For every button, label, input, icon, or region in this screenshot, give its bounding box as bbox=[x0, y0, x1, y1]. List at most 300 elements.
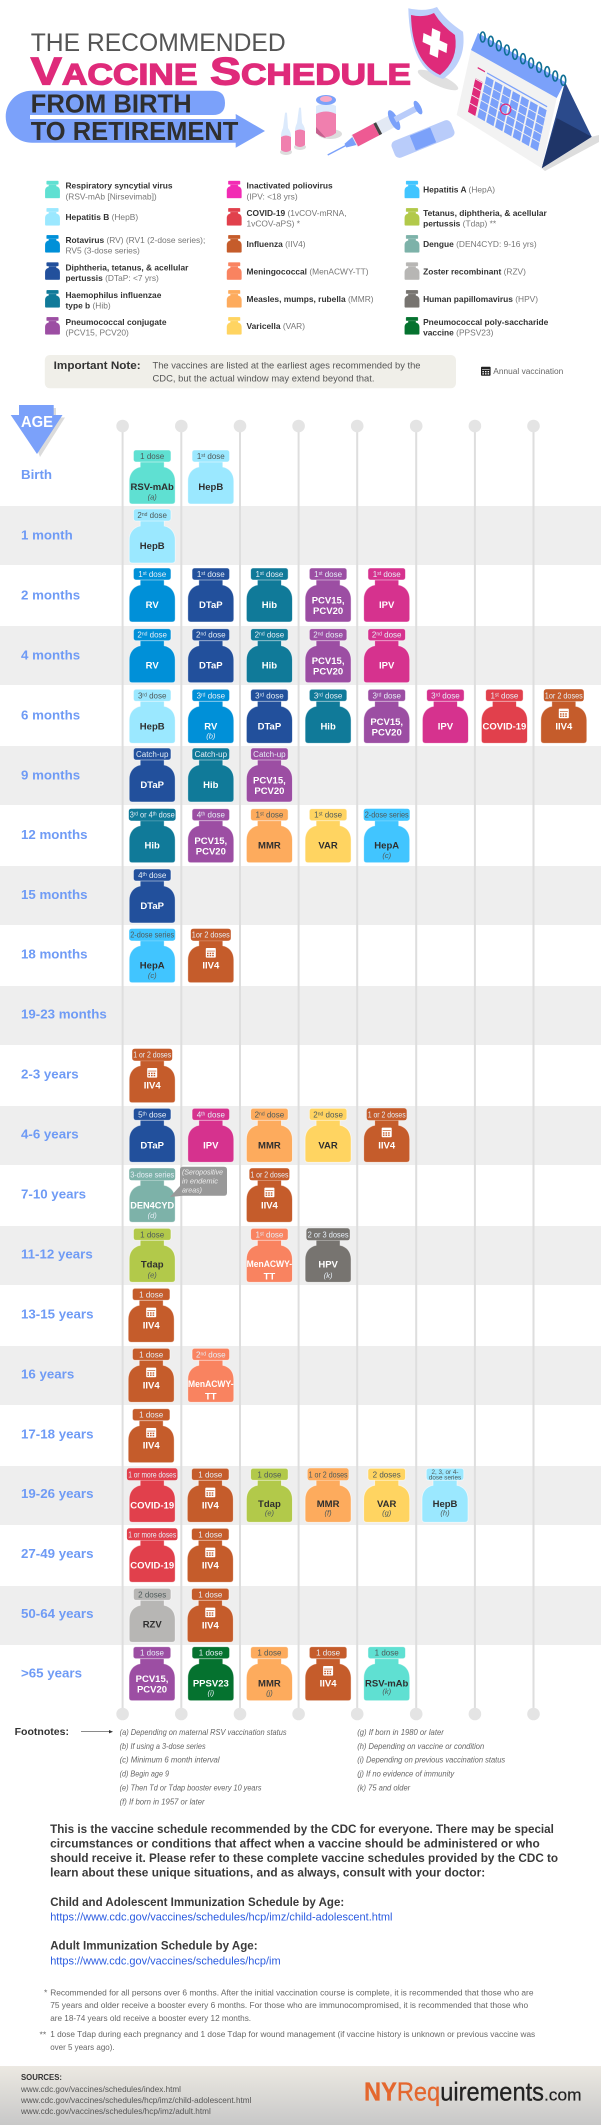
vial: HepA: 2-dose series bbox=[130, 931, 174, 940]
vial: IIV4 bbox=[364, 1108, 410, 1162]
vial: Hib: or 4 bbox=[138, 811, 153, 820]
vial: COVID-19: COVID-19 bbox=[130, 1500, 174, 1511]
logo: NYRequirements.com: NYRequirements bbox=[364, 2077, 544, 2107]
vial: DTaP: DTaP bbox=[140, 1140, 165, 1151]
age label: 18 months bbox=[21, 947, 88, 962]
callout: seropositive in endemic areas: (Seropositive bbox=[182, 1168, 223, 1177]
vial: IIV4 bbox=[305, 1647, 351, 1701]
vial: RV bbox=[188, 689, 234, 743]
vial: IPV: IPV bbox=[203, 1140, 219, 1151]
age label: 6 months bbox=[21, 707, 80, 722]
vial: MMR: dose bbox=[264, 811, 284, 820]
vial: VAR: 2 doses bbox=[373, 1470, 401, 1479]
vial: IIV4: IIV4 bbox=[202, 961, 220, 972]
age label: 27-49 years bbox=[21, 1546, 93, 1561]
vial: HPV bbox=[305, 1228, 351, 1282]
important note panel: CDC, but the actual window may extend beyond that. bbox=[152, 374, 374, 384]
vial: RSV-mAb bbox=[129, 450, 175, 504]
sources: www.cdc.gov/vaccines/schedules/hcp/imz/adult.html bbox=[20, 2106, 211, 2116]
vial: PCV: PCV20 bbox=[372, 727, 402, 738]
vial: Tdap: (e) bbox=[265, 1508, 274, 1517]
vial: RSV-mAb bbox=[364, 1647, 410, 1701]
legend item: zoster bbox=[405, 262, 526, 280]
legend item: HPV: Human papillomavirus (HPV) bbox=[423, 294, 538, 304]
text block: asterisk notes: Recommended for all persons over 6 months. After the initial vaccination course is complete, it is recommended that those who are bbox=[50, 1987, 534, 1997]
legend item: PPSV23 bbox=[405, 317, 549, 338]
legend item: PPSV23: Pneumococcal poly-saccharide bbox=[423, 317, 549, 327]
legend item: HepB: Hepatitis B (HepB) bbox=[66, 212, 138, 222]
vial: DTaP: dose bbox=[147, 871, 167, 880]
vial: HepB bbox=[129, 509, 175, 563]
vial: IPV: nd bbox=[376, 632, 382, 638]
important note panel bbox=[45, 355, 456, 388]
vial: IPV: dose bbox=[440, 691, 460, 700]
vial: IPV: IPV bbox=[438, 721, 454, 732]
vial: IIV4: IIV4 bbox=[261, 1200, 279, 1211]
text block: CDC explanation bbox=[50, 1823, 558, 1879]
vial: PPSV23: 1 dose bbox=[199, 1649, 223, 1658]
vial: MMR bbox=[305, 1468, 351, 1522]
row: 27-49 years bbox=[21, 1528, 233, 1582]
vial: HepB: 1 bbox=[197, 452, 201, 461]
vial: IIV4: IIV4 bbox=[555, 721, 573, 732]
vial: IPV: dose bbox=[381, 570, 401, 579]
vial: PPSV23: (i) bbox=[207, 1689, 215, 1698]
legend item: HepB bbox=[45, 208, 138, 226]
vial: HepB: nd bbox=[142, 512, 148, 518]
vial: IIV4 bbox=[187, 1588, 233, 1642]
legend item: Tdap: Tetanus, diphtheria, & acellular bbox=[423, 208, 547, 218]
vial: PCV: 1 dose bbox=[140, 1649, 165, 1658]
vial: MenACWY-TT: MenACWY- bbox=[188, 1379, 234, 1390]
vial: DEN4CYD: DEN4CYD bbox=[130, 1200, 175, 1210]
vial: DTaP: 2 bbox=[196, 631, 200, 640]
vial: PCV bbox=[129, 1647, 175, 1701]
vial: Hib bbox=[188, 748, 234, 802]
vial: MenACWY-TT: 1 bbox=[255, 1230, 260, 1239]
footnotes: (j) If no evidence of immunity bbox=[357, 1768, 455, 1778]
vial: MMR: dose bbox=[265, 1110, 285, 1119]
vial: Tdap: Tdap bbox=[141, 1259, 164, 1270]
vial: IIV4: 1 dose bbox=[198, 1590, 223, 1599]
vial: PCV: PCV20 bbox=[313, 606, 343, 617]
row: 7-10 years bbox=[21, 1167, 292, 1222]
arrow banner: from birth to retirement: FROM BIRTH bbox=[31, 91, 192, 119]
title line: the recommended: THE RECOMMENDED bbox=[31, 29, 286, 57]
vial: IIV4: 1 dose bbox=[198, 1530, 223, 1539]
legend item: RSV: (RSV-mAb [Nirsevimab]) bbox=[66, 191, 157, 201]
vial: IIV4: 1or 2 doses bbox=[545, 691, 583, 700]
vial: RV bbox=[129, 629, 175, 683]
arrow banner: from birth to retirement: TO RETIREMENT bbox=[31, 118, 239, 146]
vial: IPV: dose bbox=[382, 631, 402, 640]
age label: 1 month bbox=[21, 528, 73, 543]
vial: MenACWY-TT: st bbox=[260, 1231, 264, 1237]
text block: child schedule link bbox=[50, 1896, 392, 1923]
vial: Hib: 1 bbox=[255, 570, 260, 579]
text block: adult schedule link bbox=[50, 1939, 281, 1967]
vial: HepB: HepB bbox=[140, 721, 165, 732]
legend item: influenza bbox=[227, 235, 306, 253]
vial: PPSV23 bbox=[188, 1647, 234, 1701]
legend item: MMR bbox=[227, 290, 374, 308]
vial: IIV4: IIV4 bbox=[320, 1679, 337, 1690]
legend item: DTaP: Diphtheria, tetanus, & acellular bbox=[66, 262, 189, 272]
row: 15 months bbox=[21, 869, 175, 923]
vial: HepB: dose bbox=[147, 691, 167, 700]
row: 2-3 years bbox=[21, 1049, 175, 1103]
vial: MMR: nd bbox=[259, 1111, 265, 1117]
vial: RSV-mAb: RSV-mAb bbox=[131, 482, 174, 493]
vial: IPV: st bbox=[377, 571, 382, 577]
vial: RSV-mAb: 1 dose bbox=[140, 452, 165, 461]
vial: PCV: 1 bbox=[314, 570, 319, 579]
vial: DTaP bbox=[129, 1108, 175, 1162]
vial: RSV-mAb: RSV-mAb bbox=[365, 1679, 409, 1690]
vial: Hib: Hib bbox=[320, 721, 336, 732]
vial: DTaP bbox=[188, 629, 234, 683]
vial: HepA: HepA bbox=[140, 961, 165, 972]
vial: PCV: PCV15, bbox=[253, 776, 286, 786]
illustration: syringe bbox=[323, 96, 426, 165]
vial: COVID-19 bbox=[481, 689, 527, 743]
age label: >65 years bbox=[21, 1666, 82, 1681]
vial: MenACWY-TT: nd bbox=[200, 1351, 206, 1357]
text block: child schedule link: https://www.cdc.gov/vaccines/schedules/hcp/imz/child-adolescent.html bbox=[50, 1911, 392, 1923]
vial: MMR: 2 bbox=[255, 1110, 259, 1119]
vial: RV: RV bbox=[146, 600, 159, 611]
vial: MMR: 1 or 2 doses bbox=[309, 1470, 348, 1479]
vial: RV: RV bbox=[204, 721, 218, 732]
text block: child schedule link: Child and Adolescent Immunization Schedule by Age: bbox=[50, 1896, 344, 1909]
footnotes: (d) Begin age 9 bbox=[120, 1768, 169, 1778]
vial: RZV: 2 doses bbox=[138, 1590, 166, 1599]
row: 1 month bbox=[21, 509, 175, 563]
vial: IPV: 2 bbox=[372, 631, 376, 640]
legend item: RV: Rotavirus (RV) (RV1 (2-dose series); bbox=[66, 235, 205, 245]
vial: IPV: 4 bbox=[197, 1110, 201, 1119]
vial: PCV: PCV15, bbox=[312, 656, 344, 667]
age label: 2-3 years bbox=[21, 1067, 79, 1082]
title line: schedule: SCHEDULE bbox=[210, 50, 411, 93]
vial: PCV: PCV20 bbox=[313, 667, 343, 678]
vial: RV: 1 bbox=[138, 570, 143, 579]
vial: RZV bbox=[129, 1588, 175, 1642]
vial: COVID-19 bbox=[127, 1468, 178, 1522]
vial: HepB: dose bbox=[147, 511, 168, 520]
vial: Tdap: 1 dose bbox=[140, 1230, 165, 1239]
vial: VAR: dose bbox=[323, 1110, 343, 1119]
vial: MenACWY-TT: TT bbox=[264, 1272, 275, 1283]
vial: DTaP bbox=[188, 568, 234, 622]
vial: MMR: 1 bbox=[255, 811, 260, 820]
vial: IIV4: IIV4 bbox=[143, 1441, 160, 1452]
vial: DTaP: dose bbox=[205, 570, 225, 579]
vial: IIV4: IIV4 bbox=[143, 1320, 160, 1331]
vial: VAR: dose bbox=[322, 811, 343, 820]
vial: IIV4: IIV4 bbox=[202, 1560, 219, 1571]
vial: DTaP: DTaP bbox=[199, 661, 223, 672]
vial: PCV: dose bbox=[381, 691, 401, 700]
vial: MMR: MMR bbox=[258, 1679, 281, 1690]
vial: IPV bbox=[364, 629, 410, 683]
vial: DTaP: DTaP bbox=[199, 600, 223, 611]
vial: VAR: st bbox=[319, 812, 323, 818]
vial: RSV-mAb: (k) bbox=[382, 1687, 392, 1696]
vial: COVID-19 bbox=[127, 1528, 178, 1582]
vial: IIV4 bbox=[128, 1348, 174, 1402]
text block: asterisk notes: are 18-74 years old receive a booster every 12 months. bbox=[50, 2013, 251, 2023]
vial: PCV bbox=[364, 689, 410, 743]
age label: 7-10 years bbox=[21, 1187, 86, 1202]
vial: Hib: Hib bbox=[262, 661, 277, 672]
vial: HepB: 2, 3, or 4- bbox=[432, 1469, 458, 1476]
vial: RSV-mAb: (a) bbox=[148, 492, 157, 502]
vial: MMR: MMR bbox=[258, 1140, 281, 1151]
age header arrow bbox=[11, 405, 65, 457]
vial: DTaP: DTaP bbox=[258, 721, 282, 732]
vial: HepA bbox=[364, 809, 410, 863]
text block: CDC explanation: should receive it. Please refer to these complete vaccine schedules provided by the CDC to bbox=[50, 1852, 558, 1865]
legend item: DTaP bbox=[45, 262, 189, 283]
vial: IPV bbox=[364, 568, 410, 622]
vial: DTaP bbox=[246, 689, 292, 743]
footnotes: (i) Depending on previous vaccination status bbox=[357, 1754, 506, 1764]
age label: 19-23 months bbox=[21, 1007, 107, 1022]
vial: DTaP: rd bbox=[260, 692, 264, 698]
legend item: PPSV23: vaccine (PPSV23) bbox=[423, 328, 494, 338]
vial: PCV bbox=[305, 568, 351, 622]
illustration: ampoules bbox=[280, 108, 306, 155]
vial: MenACWY-TT bbox=[188, 1348, 234, 1403]
vial: MenACWY-TT bbox=[246, 1228, 292, 1283]
vial: HepB bbox=[422, 1468, 468, 1522]
age label: 4 months bbox=[21, 648, 80, 663]
vial: MMR bbox=[246, 1647, 292, 1701]
vial: Hib: th bbox=[153, 812, 157, 818]
vial: DTaP: 1 bbox=[197, 570, 201, 579]
vial: IIV4: IIV4 bbox=[143, 1380, 160, 1391]
vial: VAR: VAR bbox=[318, 1140, 338, 1151]
vial: MMR: (f) bbox=[325, 1508, 332, 1517]
illustration: bandage bbox=[390, 119, 456, 159]
vial: Hib: dose bbox=[265, 631, 285, 640]
vial: Hib bbox=[246, 629, 292, 683]
legend item: MMR: Measles, mumps, rubella (MMR) bbox=[246, 294, 374, 304]
footnotes: (b) If using a 3-dose series bbox=[120, 1741, 206, 1751]
vial: IIV4: 1 dose bbox=[316, 1649, 341, 1658]
vial: DTaP: dose bbox=[264, 691, 284, 700]
age label: 17-18 years bbox=[21, 1426, 93, 1441]
vial: PCV: dose bbox=[205, 811, 225, 820]
title bbox=[31, 29, 411, 93]
sources: SOURCES: bbox=[21, 2072, 62, 2082]
vial: RV bbox=[129, 568, 175, 622]
vial: RZV: RZV bbox=[143, 1619, 162, 1630]
vial: PCV: dose bbox=[322, 570, 343, 579]
row: 4-6 years bbox=[21, 1108, 410, 1162]
logo: NYRequirements.com: .com bbox=[544, 2086, 582, 2105]
vial: HPV: 2 or 3 doses bbox=[308, 1230, 349, 1239]
vial: COVID-19: 1 bbox=[490, 691, 495, 700]
legend item: HPV bbox=[405, 290, 538, 308]
vial: IIV4 bbox=[128, 1288, 174, 1342]
vial: PCV: PCV20 bbox=[137, 1685, 167, 1696]
vial: MMR: MMR bbox=[317, 1499, 340, 1510]
vial: HepA: 2-dose series bbox=[365, 811, 409, 820]
important note panel: Important Note: bbox=[54, 360, 141, 372]
vial: Tdap: 1 dose bbox=[257, 1470, 282, 1479]
vial: HepA: HepA bbox=[374, 841, 399, 852]
vial: MenACWY-TT: 2 bbox=[196, 1350, 200, 1359]
vial: MenACWY-TT: dose bbox=[206, 1350, 226, 1359]
illustration: calendar bbox=[457, 32, 599, 171]
legend item: dengue: Dengue (DEN4CYD: 9-16 yrs) bbox=[423, 239, 537, 249]
legend item: meningococcal bbox=[227, 262, 369, 280]
legend item: RV bbox=[45, 235, 205, 256]
age label: 50-64 years bbox=[21, 1606, 93, 1621]
vial: IIV4 bbox=[541, 689, 587, 743]
vial: PCV: PCV15, bbox=[370, 717, 403, 728]
vial: HepB: dose bbox=[205, 452, 225, 461]
vial: IPV: th bbox=[201, 1111, 206, 1117]
legend item: Tdap: pertussis (Tdap) ** bbox=[423, 219, 497, 229]
vial: DTaP: DTaP bbox=[140, 780, 165, 791]
vial: COVID-19: COVID-19 bbox=[482, 721, 526, 732]
vial: COVID-19: COVID-19 bbox=[130, 1560, 174, 1571]
legend item: varicella bbox=[227, 317, 305, 335]
vial: PCV: 4 bbox=[197, 811, 201, 820]
vial: DTaP bbox=[129, 869, 175, 923]
text block: asterisk notes: ** bbox=[40, 2030, 47, 2040]
sources: www.cdc.gov/vaccines/schedules/hcp/imz/child-adolescent.html bbox=[20, 2095, 251, 2105]
vial: MMR bbox=[246, 1108, 292, 1162]
row: 50-64 years bbox=[21, 1588, 233, 1642]
vial: PCV: th bbox=[201, 812, 206, 818]
vial: IIV4: 1 dose bbox=[198, 1470, 223, 1479]
legend: vaccine key bbox=[45, 181, 549, 338]
vial: DTaP: th bbox=[143, 1111, 147, 1117]
footnotes: (c) Minimum 6 month interval bbox=[120, 1754, 221, 1764]
vial: PCV: rd bbox=[377, 692, 382, 698]
vial: Hib: dose bbox=[323, 691, 343, 700]
vial: Hib: 3 bbox=[314, 691, 318, 700]
vial: Tdap: (e) bbox=[148, 1270, 157, 1279]
text block: CDC explanation: This is the vaccine schedule recommended by the CDC for everyone. There may be special bbox=[50, 1823, 554, 1836]
vial: DTaP: DTaP bbox=[140, 901, 165, 912]
vial: VAR: nd bbox=[318, 1111, 324, 1117]
vial: IIV4 bbox=[129, 1049, 175, 1103]
row: 11-12 years bbox=[21, 1228, 351, 1283]
vial: IIV4 bbox=[246, 1168, 292, 1222]
vial: DTaP bbox=[129, 748, 175, 802]
vial: IPV: IPV bbox=[379, 661, 395, 672]
vial: Tdap: Tdap bbox=[258, 1499, 281, 1510]
vial: IIV4: 1 or 2 doses bbox=[250, 1170, 288, 1179]
vial: HepB: HepB bbox=[433, 1499, 458, 1510]
age header arrow: AGE bbox=[21, 414, 53, 431]
vial: DTaP: 5 bbox=[138, 1110, 143, 1119]
illustration: medicine bottle bbox=[316, 95, 342, 139]
vial: IIV4 bbox=[188, 929, 234, 983]
vial: HepA bbox=[129, 929, 175, 983]
vial: IIV4: IIV4 bbox=[202, 1500, 219, 1511]
text block: CDC explanation: circumstances or conditions that affect when a vaccine should be administered or who bbox=[50, 1837, 540, 1850]
vial: IPV: IPV bbox=[379, 600, 395, 611]
vial: COVID-19: st bbox=[495, 692, 499, 698]
vial: MMR: 1 dose bbox=[257, 1649, 282, 1658]
footnotes: (e) Then Td or Tdap booster every 10 years bbox=[120, 1782, 262, 1792]
legend item: COVID-19: COVID-19 (1vCOV-mRNA, bbox=[246, 208, 347, 218]
vial: DTaP: 4 bbox=[138, 871, 143, 880]
legend item: COVID-19 bbox=[227, 208, 347, 229]
row: over 65 years bbox=[21, 1647, 410, 1701]
age label: 2 months bbox=[21, 588, 80, 603]
vial: HepB bbox=[188, 450, 234, 504]
vial: VAR: VAR bbox=[318, 841, 338, 852]
important note panel: The vaccines are listed at the earliest ages recommended by the bbox=[152, 360, 421, 370]
legend item: Hib: type b (Hib) bbox=[66, 301, 111, 311]
vial: RV: rd bbox=[201, 692, 206, 698]
vial: Hib: rd bbox=[318, 692, 323, 698]
vial: IPV: 3 bbox=[431, 691, 436, 700]
vial: RV: dose bbox=[147, 570, 167, 579]
arrow banner: from birth to retirement bbox=[6, 91, 265, 148]
vial: PCV: PCV15, bbox=[194, 836, 227, 847]
vial: HepB: dose series bbox=[429, 1474, 461, 1481]
vial: DTaP: th bbox=[143, 872, 147, 878]
vial: Hib: dose bbox=[157, 811, 175, 820]
title line: vaccine: VACCINE bbox=[31, 50, 197, 93]
vial: MenACWY-TT: dose bbox=[264, 1230, 284, 1239]
vial: HepB: rd bbox=[142, 692, 147, 698]
vial: VAR bbox=[305, 1108, 351, 1162]
vial: VAR: (g) bbox=[382, 1508, 392, 1517]
vial: IPV: 1 bbox=[373, 570, 377, 579]
vial: RV: dose bbox=[147, 631, 168, 640]
vial: IPV bbox=[188, 1108, 234, 1162]
legend item: PCV: Pneumococcal conjugate bbox=[66, 317, 167, 327]
vial: COVID-19: dose bbox=[499, 691, 519, 700]
footnotes: (g) If born in 1980 or later bbox=[357, 1727, 445, 1737]
vial: RV: (b) bbox=[206, 731, 216, 740]
age label: 4-6 years bbox=[21, 1127, 79, 1142]
vial: HepB: st bbox=[201, 453, 206, 459]
vial: DTaP: Catch-up bbox=[136, 750, 169, 759]
legend item: PCV bbox=[45, 317, 167, 338]
vial: HepB: 2 bbox=[137, 511, 142, 520]
footer band bbox=[0, 2066, 601, 2125]
vial: PCV bbox=[305, 629, 351, 683]
vial: HPV: (k) bbox=[324, 1271, 333, 1280]
vial: DTaP: nd bbox=[200, 632, 206, 638]
row: 18 months bbox=[21, 929, 234, 983]
vial: RV: dose bbox=[205, 691, 226, 700]
vial: IIV4: 1 dose bbox=[139, 1350, 164, 1359]
vial: Hib: Catch-up bbox=[195, 750, 228, 759]
vial: Tdap bbox=[129, 1228, 175, 1282]
age label: Birth bbox=[21, 467, 52, 482]
vial: COVID-19: 1 or more doses bbox=[128, 1530, 176, 1539]
legend item: COVID-19: 1vCOV-aPS) * bbox=[246, 219, 301, 229]
illustration: shield bbox=[408, 7, 464, 94]
vial: IIV4: IIV4 bbox=[202, 1620, 219, 1631]
age label: 12 months bbox=[21, 827, 88, 842]
vial: PCV: PCV20 bbox=[254, 786, 284, 797]
row: 12 months bbox=[21, 809, 410, 863]
vial: VAR: 1 bbox=[314, 811, 319, 820]
vial: Hib: 2 bbox=[255, 631, 259, 640]
